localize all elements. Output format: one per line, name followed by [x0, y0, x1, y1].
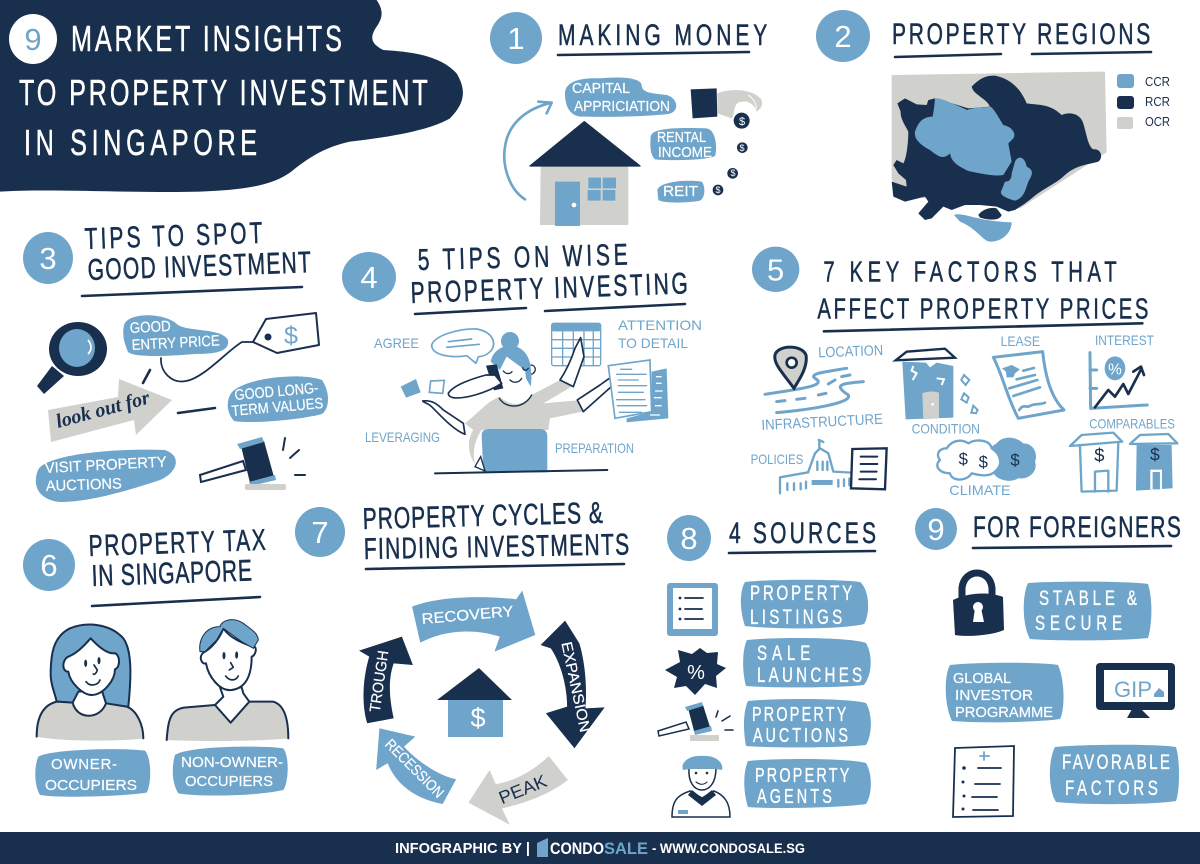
label: visit property auctions: AUCTIONS — [46, 475, 122, 495]
icon: house with dollar — [437, 668, 512, 737]
badge 3 — [23, 232, 73, 284]
label: global investor programme — [946, 663, 1064, 722]
badge 7 — [295, 507, 345, 557]
legend: regions: OCR — [1145, 114, 1170, 129]
heading: property tax: IN SINGAPORE — [91, 555, 252, 593]
factor: location and infrastructure: LOCATION — [818, 343, 883, 361]
badge 2: 2 — [834, 19, 852, 54]
icon: hand dropping coins — [691, 88, 762, 195]
label: good long-term values: GOOD LONG- — [234, 380, 319, 404]
factor: condition: CONDITION — [912, 420, 980, 436]
header: title banner — [0, 0, 463, 192]
badge 6: 6 — [40, 548, 58, 583]
heading: tips to spot — [84, 217, 312, 287]
factor: comparables: $ — [1094, 445, 1104, 466]
arrow: recession: RECESSION — [381, 736, 447, 802]
heading: 7 key factors: AFFECT PROPERTY PRICES — [817, 293, 1148, 325]
heading: property cycles — [362, 497, 629, 566]
icon: tablet listing — [667, 583, 718, 636]
label: owner-occupiers — [35, 749, 150, 797]
arrow: peak: PEAK — [496, 771, 550, 808]
label: property agents: PROPERTY — [755, 764, 850, 787]
heading: 7 key factors — [817, 256, 1148, 325]
heading: property tax: PROPERTY TAX — [88, 524, 266, 563]
heading: tips to spot: GOOD INVESTMENT — [87, 247, 312, 287]
badge 3: 3 — [39, 241, 57, 276]
panel 6: property tax in singapore — [23, 524, 288, 797]
panel 3: tips to spot good investment — [23, 217, 328, 502]
badge 1: 1 — [507, 21, 525, 56]
panel 9: for foreigners — [915, 508, 1181, 817]
heading: 4 sources: 4 SOURCES — [729, 518, 876, 550]
badge 7: 7 — [311, 515, 329, 550]
label: favorable factors: FACTORS — [1065, 775, 1158, 800]
icon: sale burst: % — [687, 662, 705, 684]
label: property agents — [744, 759, 871, 808]
legend: regions — [1117, 74, 1170, 129]
factor: condition — [896, 349, 980, 436]
badge 9 — [915, 508, 957, 550]
label: rental income — [650, 128, 716, 161]
icon: documents — [608, 360, 668, 422]
label: good long-term values: TERM VALUES — [231, 395, 324, 420]
badge 6 — [23, 539, 75, 591]
arrow: look out for — [48, 379, 172, 442]
label: agree: AGREE — [374, 335, 419, 351]
heading: 5 tips on wise property investing: PROPERTY INVESTING — [410, 268, 688, 310]
label: good entry price: GOOD — [129, 318, 171, 337]
arrow: trough: TROUGH — [367, 649, 392, 713]
arrow: trough — [359, 637, 413, 723]
label: capital appreciation — [565, 77, 676, 117]
label: non-owner-occupiers: OCCUPIERS — [185, 773, 273, 790]
label: sale launches: SALE — [757, 640, 810, 665]
legend: regions: RCR — [1145, 94, 1170, 109]
label: capital appreciation: CAPITAL — [572, 80, 630, 97]
icon: hand dropping coins: $ — [730, 168, 736, 178]
footer: credit bar — [0, 832, 1200, 864]
legend: regions: CCR — [1145, 74, 1170, 89]
label: property listings — [741, 580, 868, 629]
heading: 5 tips on wise property investing: 5 TIPS ON WISE — [417, 239, 628, 277]
factor: climate: $ — [979, 452, 988, 471]
header: title banner: IN SINGAPORE — [24, 123, 257, 163]
icon: hand dropping coins: $ — [715, 185, 721, 195]
diagram: arrows of the cycle — [359, 591, 605, 825]
factor: climate: CLIMATE — [949, 482, 1011, 498]
icon: GIP monitor: GIP — [1114, 677, 1152, 702]
badge 4 — [342, 252, 396, 302]
header: title banner: 9 — [24, 22, 42, 57]
label: stable and secure — [1024, 582, 1151, 640]
icon: GIP monitor — [1096, 663, 1175, 718]
footer: credit bar: CONDO — [550, 839, 604, 858]
header: title banner: MARKET INSIGHTS — [71, 19, 342, 59]
factor: climate — [937, 438, 1036, 498]
arrow: peak — [468, 756, 568, 825]
label: global investor programme: PROGRAMME — [955, 704, 1053, 721]
label: preparation: PREPARATION — [555, 440, 634, 456]
badge 8 — [667, 515, 711, 561]
factor: climate: $ — [1010, 450, 1020, 469]
factor: policies — [751, 440, 887, 493]
icon: blocks — [401, 379, 444, 398]
panel 8: sources — [658, 515, 876, 817]
label: global investor programme: INVESTOR — [955, 687, 1033, 704]
footer: credit bar: SALE — [604, 839, 648, 858]
illustration: multitasking woman — [423, 332, 615, 473]
label: good long-term values — [228, 376, 328, 422]
label: non-owner-occupiers — [173, 747, 288, 796]
factor: location and infrastructure — [761, 343, 884, 434]
factor: lease: LEASE — [1001, 333, 1040, 349]
heading: making money: MAKING MONEY — [558, 20, 767, 52]
label: property listings: LISTINGS — [750, 604, 842, 629]
label: property listings: PROPERTY — [750, 580, 852, 605]
arrow: look out for: look out for — [54, 387, 152, 433]
icon: price tag with string — [161, 313, 319, 381]
factor: policies: POLICIES — [751, 451, 803, 467]
arrow: expansion — [541, 621, 605, 748]
icon: calendar — [552, 323, 601, 366]
icon: magnifying glass — [37, 322, 107, 394]
icon: property agent — [672, 756, 730, 817]
label: good entry price: ENTRY PRICE — [131, 332, 220, 354]
label: favorable factors — [1050, 745, 1179, 804]
label: property agents: AGENTS — [757, 785, 832, 808]
panel 7: property cycles and finding investments — [295, 497, 629, 825]
footer: credit bar: INFOGRAPHIC BY | — [395, 840, 530, 857]
icon: price tag with string: $ — [284, 322, 298, 350]
heading: 5 tips on wise property investing — [410, 239, 688, 310]
label: owner-occupiers: OWNER- — [51, 756, 117, 773]
factor: location and infrastructure: INFRASTRUCTURE — [761, 412, 884, 434]
factor: interest: % — [1108, 361, 1122, 378]
factor: comparables: COMPARABLES — [1089, 415, 1175, 431]
label: sale launches: LAUNCHES — [757, 662, 862, 687]
badge 4: 4 — [360, 260, 378, 295]
factor: comparables: $ — [1150, 445, 1160, 465]
label: capital appreciation: APPRICIATION — [574, 98, 670, 115]
badge 9: 9 — [927, 512, 945, 547]
label: sale launches — [743, 638, 871, 687]
label: rental income: INCOME — [658, 144, 712, 161]
panel 5: key factors that affect property prices — [751, 247, 1177, 498]
label: good entry price — [123, 315, 228, 356]
label: REIT — [657, 181, 704, 203]
factor: interest — [1090, 332, 1154, 408]
badge 5 — [752, 247, 799, 292]
icon: padlock — [953, 573, 1004, 636]
heading: property cycles: FINDING INVESTMENTS — [364, 529, 629, 566]
heading: property regions: PROPERTY REGIONS — [892, 19, 1150, 51]
panel 2: property regions — [816, 10, 1170, 242]
badge 5: 5 — [767, 253, 784, 288]
arrow: expansion: EXPANSION — [558, 640, 593, 734]
factor: climate: $ — [959, 450, 968, 469]
badge 1 — [490, 12, 542, 64]
heading: property cycles: PROPERTY CYCLES & — [362, 497, 603, 536]
icon: checklist — [953, 746, 1014, 817]
label: attention to detail: ATTENTION — [618, 317, 702, 333]
illustration: man non-owner-occupier — [167, 620, 288, 741]
panel 1: making money — [490, 12, 767, 226]
icon: hand dropping coins: $ — [739, 143, 745, 153]
label: REIT: REIT — [663, 183, 698, 200]
label: property auctions: AUCTIONS — [753, 724, 848, 747]
heading: property tax — [88, 524, 266, 593]
map: Singapore regions — [892, 72, 1107, 242]
footer: credit bar: - WWW.CONDOSALE.SG — [652, 840, 805, 856]
panel 4: tips on wise property investing — [342, 239, 702, 473]
factor: comparables — [1070, 415, 1177, 492]
factor: lease — [993, 333, 1064, 418]
label: stable and secure: STABLE & — [1039, 585, 1137, 610]
heading: for foreigners: FOR FOREIGNERS — [973, 512, 1181, 544]
arrow: recovery: RECOVERY — [421, 603, 514, 628]
illustration: woman owner-occupier — [37, 625, 143, 741]
icon: gavel — [200, 437, 305, 490]
icon: gavel — [658, 702, 733, 741]
badge 2 — [816, 10, 870, 62]
label: global investor programme: GLOBAL — [953, 670, 1011, 687]
header: title banner: TO PROPERTY INVESTMENT — [19, 73, 428, 113]
icon: sale burst — [665, 648, 726, 695]
label: visit property auctions — [36, 450, 176, 502]
badge 8: 8 — [680, 521, 698, 556]
label: visit property auctions: VISIT PROPERTY — [44, 454, 167, 477]
icon: hand dropping coins: $ — [739, 116, 745, 128]
heading: 7 key factors: 7 KEY FACTORS THAT — [823, 256, 1117, 289]
label: property auctions: PROPERTY — [752, 703, 847, 726]
label: owner-occupiers: OCCUPIERS — [45, 777, 137, 794]
icon: speech bubble — [432, 329, 494, 363]
label: favorable factors: FAVORABLE — [1062, 749, 1170, 774]
label: rental income: RENTAL — [657, 129, 706, 146]
label: stable and secure: SECURE — [1035, 610, 1122, 635]
heading: tips to spot: TIPS TO SPOT — [84, 217, 263, 256]
factor: interest: INTEREST — [1095, 332, 1154, 348]
icon: house with rising arrow — [504, 102, 640, 226]
label: non-owner-occupiers: NON-OWNER- — [181, 754, 283, 771]
label: property auctions — [744, 699, 871, 747]
icon: house with dollar: $ — [470, 703, 486, 733]
label: attention to detail: TO DETAIL — [618, 335, 688, 351]
label: attention to detail — [618, 317, 702, 351]
label: leveraging: LEVERAGING — [365, 429, 440, 445]
arrow: recovery — [412, 591, 535, 652]
